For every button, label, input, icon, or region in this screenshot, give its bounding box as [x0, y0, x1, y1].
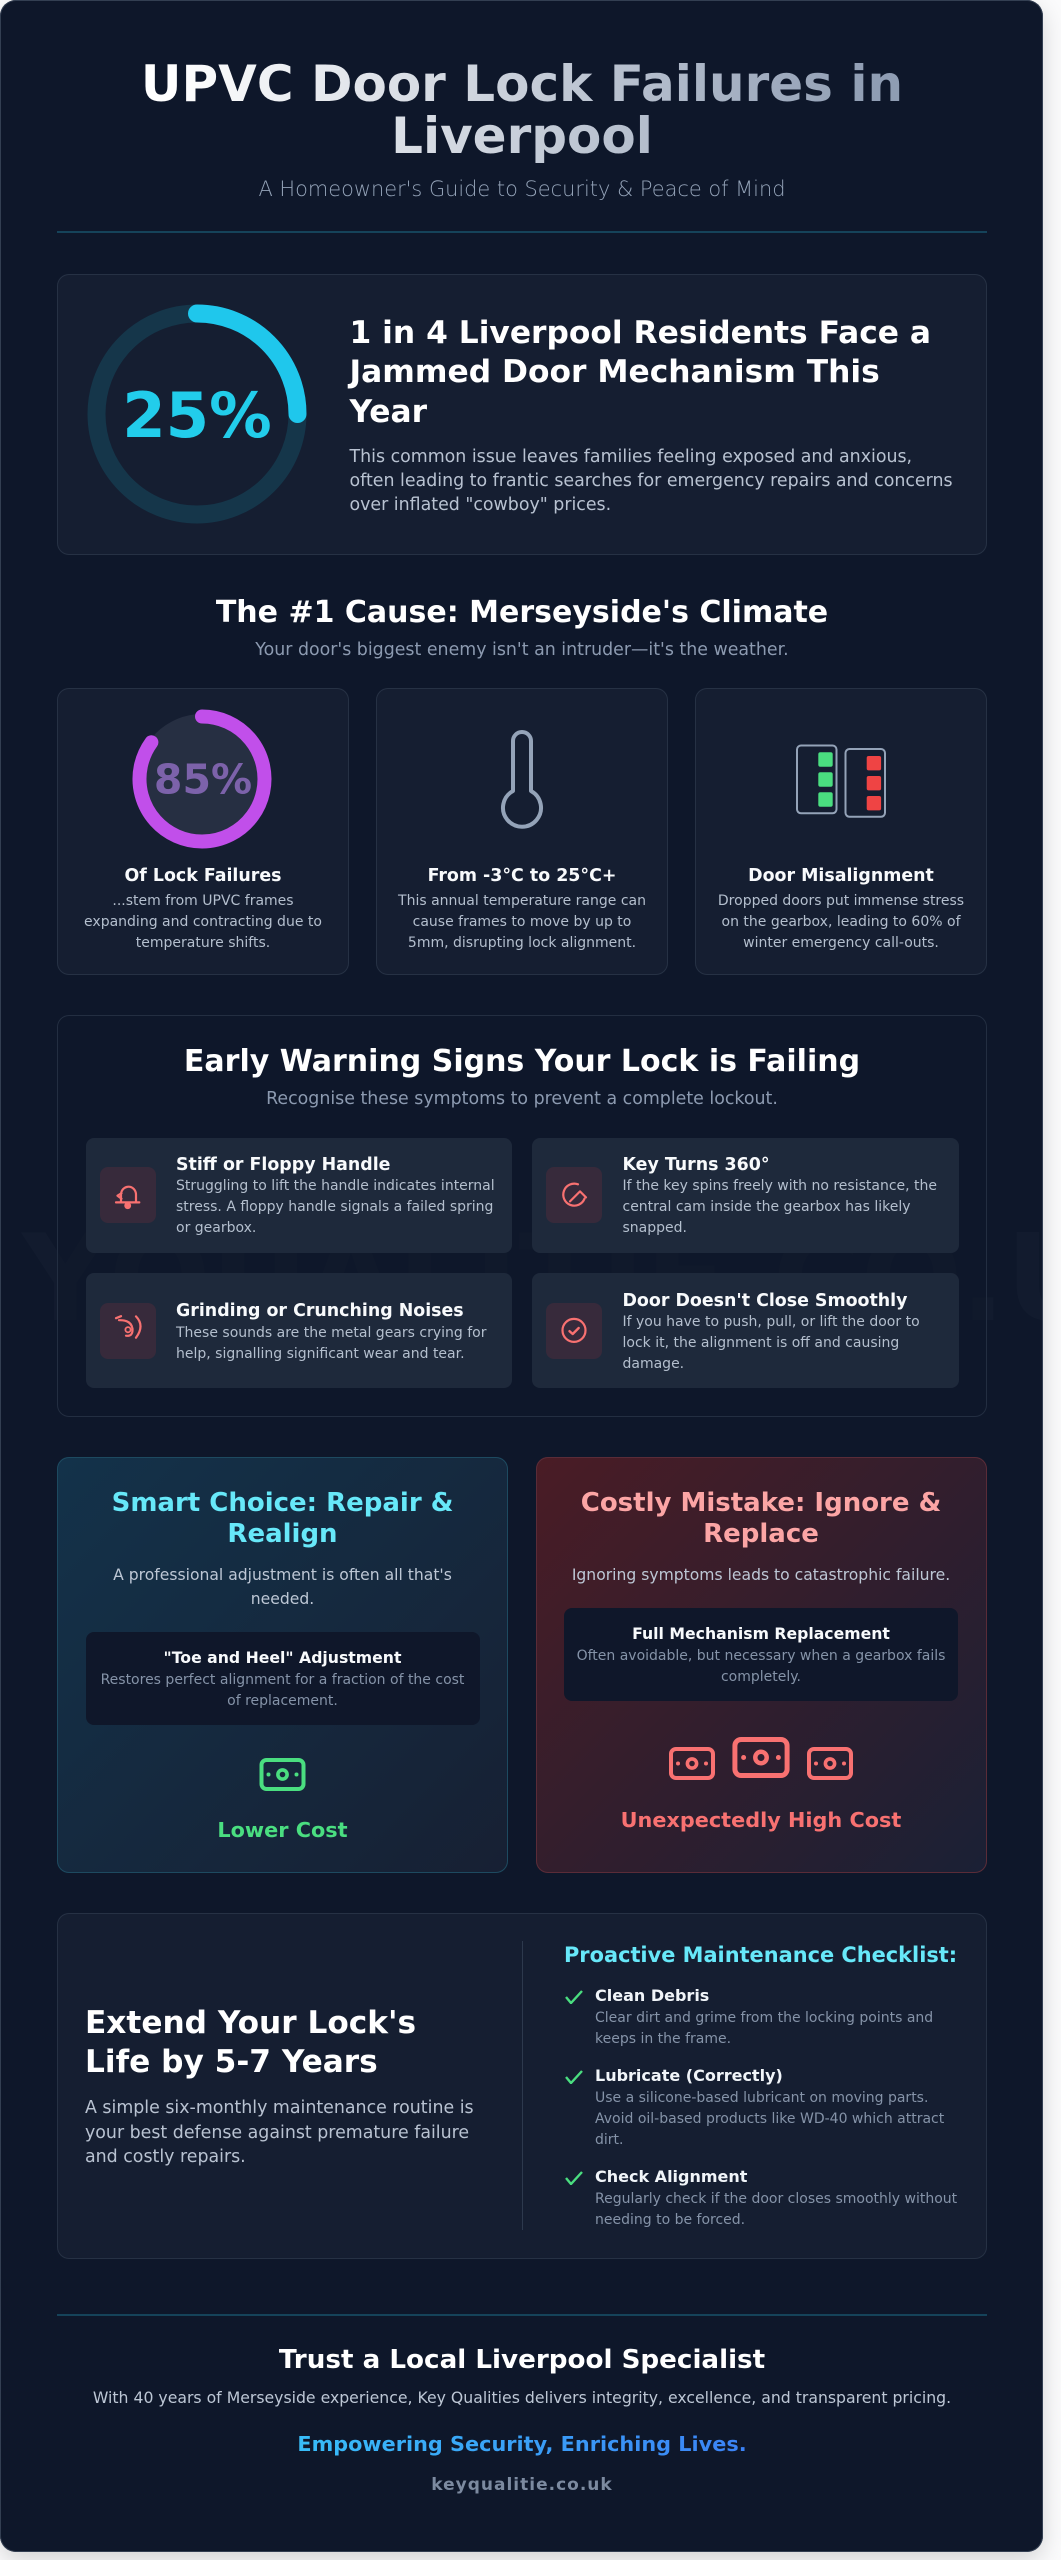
heading: the #1 cause: The #1 Cause: Merseyside's Climate [216, 595, 828, 630]
heading: costly mistake: Replace [703, 1518, 819, 1548]
box: full mechanism replacement [564, 1608, 958, 1701]
checklist text: alignment [595, 2191, 957, 2228]
footer text: With 40 years of Merseyside experience, Key Qualities delivers integrity, excellence, and transparent pricing. [93, 2388, 951, 2407]
item text: stress. A floppy handle signals a failed spring [176, 1199, 493, 1215]
heading: costly mistake [581, 1488, 941, 1548]
hero body text: This common issue leaves families feeling exposed and anxious, [350, 446, 912, 466]
description: misalignment: on the gearbox, leading to 60% of [722, 914, 960, 930]
item text: snapped. [622, 1220, 687, 1236]
item text: central cam inside the gearbox has likely [622, 1199, 910, 1215]
item text: lock it, the alignment is off and causing [622, 1335, 899, 1351]
checklist title: clean debris: Clean Debris [595, 1986, 709, 2005]
icon: check alignment [565, 2171, 583, 2185]
body: professional adjustment: A professional adjustment is often all that's [113, 1566, 452, 1584]
tagline: Empowering Security, Enriching Lives. [297, 2432, 747, 2456]
icon: money note small right [807, 1747, 853, 1780]
hero heading: 1 in 4 Liverpool Residents Face a [350, 315, 931, 351]
heading: extend lock life [85, 2005, 416, 2080]
checklist text: lubricate: Use a silicone-based lubricant on moving parts. [595, 2090, 928, 2106]
description: UPVC frames: temperature shifts. [136, 935, 270, 951]
description: UPVC frames [84, 893, 322, 951]
item: door doesn't close smoothly [532, 1273, 958, 1388]
item text: If you have to push, pull, or lift the door to [622, 1314, 920, 1330]
box title: "Toe and Heel" Adjustment [164, 1648, 401, 1667]
hero body text: over inflated "cowboy" prices. [350, 495, 611, 515]
description: temperature: 5mm, disrupting lock alignment. [408, 935, 636, 951]
item text [176, 1178, 495, 1236]
item title: Grinding or Crunching Noises [176, 1301, 464, 1321]
item text: If the key spins freely with no resistance, the [622, 1178, 937, 1194]
label: lower cost: Lower Cost [217, 1818, 348, 1842]
description: misalignment: winter emergency call-outs. [743, 935, 939, 951]
hero heading: Jammed Door Mechanism This [350, 354, 880, 390]
box text: completely. [721, 1669, 801, 1685]
item text: damage. [622, 1356, 684, 1372]
body: professional adjustment: needed. [251, 1590, 314, 1608]
subtitle: A Homeowner's Guide to Security & Peace of Mind [258, 177, 786, 201]
icon: key cam [546, 1167, 602, 1223]
checklist text: alignment: needing to be forced. [595, 2212, 745, 2228]
item: key turns 360 [532, 1138, 958, 1253]
panel: smart choice repair [57, 1457, 508, 1873]
checklist text: clean debris [595, 2010, 933, 2047]
item text: or gearbox. [176, 1220, 256, 1236]
icon: money note large [732, 1737, 790, 1778]
description: UPVC frames: expanding and contracting due to [84, 914, 322, 930]
checklist text: clean debris: Clear dirt and grime from the locking points and [595, 2010, 933, 2026]
website url: keyqualitie.co.uk [431, 2475, 613, 2495]
header divider [57, 231, 987, 233]
box text: of replacement. [227, 1693, 338, 1709]
heading: early warning: Early Warning Signs Your Lock is Failing [184, 1044, 860, 1079]
body: maintenance routine [85, 2098, 474, 2167]
heading: smart choice: Realign [227, 1518, 338, 1548]
description: misalignment: Dropped doors put immense stress [718, 893, 964, 909]
panel: early warning signs [57, 1015, 987, 1417]
body: professional adjustment [113, 1566, 452, 1608]
item title: Key Turns 360° [622, 1155, 770, 1175]
panel: 85% of lock failures [57, 688, 349, 975]
description: UPVC frames: ...stem from UPVC frames [112, 893, 294, 909]
item text: Struggling to lift the handle indicates internal [176, 1178, 495, 1194]
title: Liverpool [391, 107, 653, 165]
description: misalignment [718, 893, 964, 951]
icon: circled check [546, 1303, 602, 1359]
divider [522, 1941, 523, 2230]
subheading: early warning: Recognise these symptoms to prevent a complete lockout. [266, 1089, 778, 1109]
chart: 85% progress ring [132, 710, 272, 848]
panel: costly mistake [536, 1457, 987, 1873]
box title: Full Mechanism Replacement [632, 1624, 890, 1643]
subheading: climate: Your door's biggest enemy isn't an intruder—it's the weather. [255, 640, 789, 660]
title [57, 58, 987, 163]
icon: thermometer [500, 730, 544, 829]
icon: money note small left [669, 1747, 715, 1780]
item text: help, signalling significant wear and tear. [176, 1346, 465, 1362]
heading: checklist: Proactive Maintenance Checklist: [564, 1943, 957, 1967]
box text: Restores perfect alignment for a fraction of the cost [101, 1672, 464, 1688]
checklist title: alignment: Check Alignment [595, 2167, 747, 2186]
chart: 25% progress ring: 25% [122, 378, 272, 452]
icon: door misalignment [796, 744, 886, 818]
icon: handle [100, 1167, 156, 1223]
panel: temperature range [376, 688, 668, 975]
body: maintenance routine: A simple six-monthly maintenance routine is [85, 2098, 474, 2118]
label: door misalignment: Door Misalignment [748, 866, 934, 886]
box text [101, 1672, 464, 1709]
body: ignoring symptoms: Ignoring symptoms leads to catastrophic failure. [572, 1566, 950, 1584]
box: toe and heel [86, 1632, 480, 1725]
item title: Door Doesn't Close Smoothly [622, 1291, 907, 1311]
heading: costly mistake: Costly Mistake: Ignore & [581, 1488, 941, 1518]
panel: extend lock life and checklist [57, 1913, 987, 2259]
item text [622, 1314, 920, 1372]
item: stiff or floppy handle [86, 1138, 512, 1253]
hero body text [349, 446, 953, 515]
hero body text: often leading to frantic searches for emergency repairs and concerns [350, 471, 953, 491]
icons: three money notes [669, 1737, 853, 1780]
item text [622, 1178, 937, 1236]
checklist text: lubricate: dirt. [595, 2132, 623, 2148]
box text: Often avoidable, but necessary when a gearbox fails [577, 1648, 945, 1664]
description: temperature: This annual temperature range can [398, 893, 646, 909]
body: maintenance routine: your best defense against premature failure [85, 2123, 469, 2143]
item text [176, 1325, 486, 1362]
heading: smart choice: Smart Choice: Repair & [112, 1488, 453, 1518]
icon: check clean [565, 1990, 583, 2004]
item title: Stiff or Floppy Handle [176, 1155, 390, 1175]
checklist text: alignment: Regularly check if the door closes smoothly without [595, 2191, 957, 2207]
chart: 85% progress ring: 85% [154, 756, 252, 804]
checklist text: lubricate: Avoid oil-based products like WD-40 which attract [595, 2111, 944, 2127]
description: temperature: cause frames to move by up to [413, 914, 631, 930]
description: temperature [398, 893, 646, 951]
label: of lock failures: Of Lock Failures [124, 866, 281, 886]
label: unexpectedly high cost: Unexpectedly High Cost [621, 1808, 901, 1832]
title: UPVC Door Lock Failures in [141, 55, 903, 113]
icon: check lubricate [565, 2070, 583, 2084]
checklist text: lubricate [595, 2090, 944, 2148]
hero heading [348, 315, 931, 430]
heading: extend lock life: Life by 5-7 Years [85, 2044, 378, 2080]
icon: money note green [260, 1758, 306, 1791]
panel: door misalignment [695, 688, 987, 975]
item text: These sounds are the metal gears crying for [176, 1325, 486, 1341]
heading: smart choice [112, 1488, 453, 1548]
hero heading: Year [350, 394, 427, 430]
label: temperature: From -3°C to 25°C+ [428, 866, 616, 886]
body: maintenance routine: and costly repairs. [85, 2147, 246, 2167]
heading: extend lock life: Extend Your Lock's [85, 2005, 416, 2041]
chart: 25% progress ring [88, 304, 306, 524]
item: grinding noises [86, 1273, 512, 1388]
footer heading: Trust a Local Liverpool Specialist [279, 2344, 765, 2374]
checklist title: lubricate: Lubricate (Correctly) [595, 2066, 783, 2085]
footer divider [57, 2314, 987, 2316]
icon: grinding sound [100, 1303, 156, 1359]
panel: 25% hero statistic [57, 274, 987, 555]
checklist text: clean debris: keeps in the frame. [595, 2031, 731, 2047]
box text [577, 1648, 945, 1685]
